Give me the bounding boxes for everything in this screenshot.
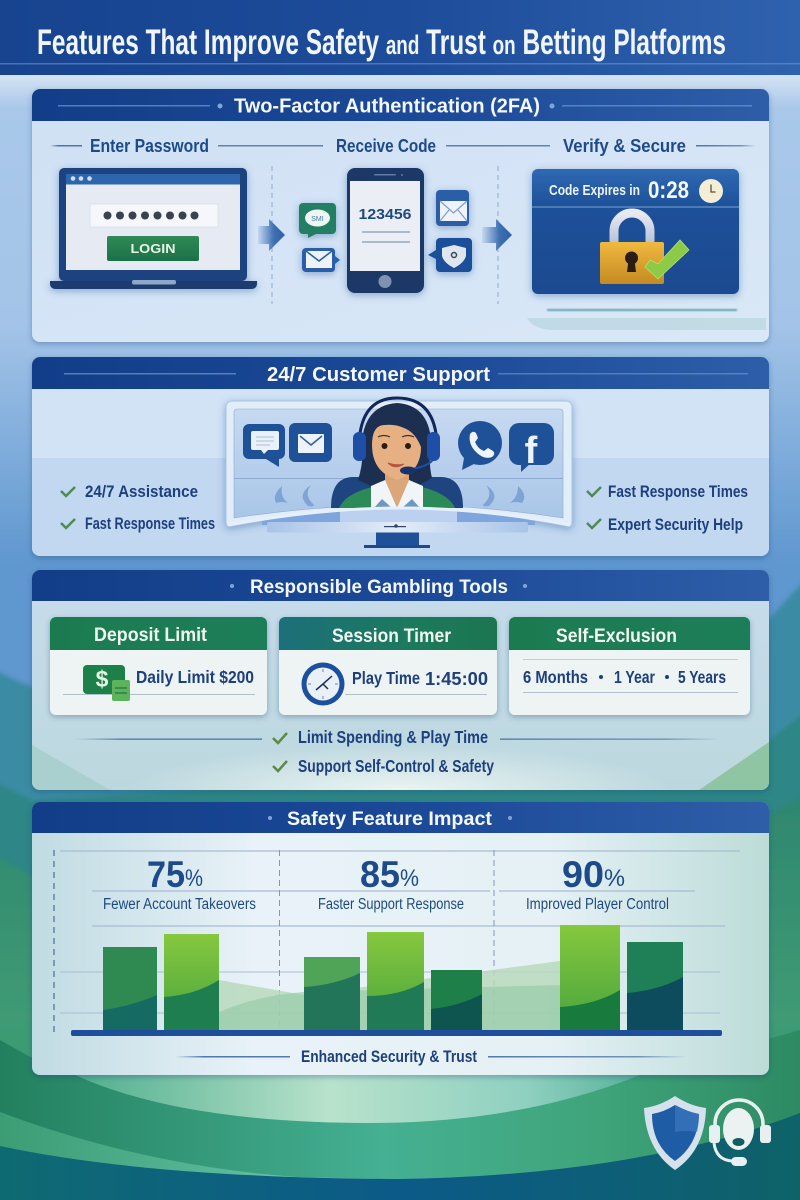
monitor with agent — [226, 398, 572, 548]
card: code expiry and lock: Code Expires in — [549, 182, 640, 199]
panel header: tools: Responsible Gambling Tools — [250, 577, 508, 598]
icon: phone bubble — [458, 421, 502, 470]
icon: money: $ — [96, 666, 109, 692]
stat: 75% — [103, 854, 256, 913]
card: deposit limit: Daily Limit $200 — [136, 667, 254, 687]
icon: facebook bubble — [509, 423, 554, 472]
bar 7 — [627, 942, 683, 1032]
bar 6 — [560, 925, 620, 1032]
icon: phone with code: 123456 — [358, 206, 412, 223]
benefits list: Support Self-Control & Safety — [298, 756, 494, 776]
icon: envelope right — [436, 190, 469, 226]
chart baseline — [71, 1030, 722, 1036]
chart grid — [54, 850, 740, 1035]
bar 5 — [431, 970, 482, 1032]
icon: clock — [699, 179, 723, 203]
panel header: tools — [32, 570, 769, 601]
list: right benefits: Fast Response Times — [608, 483, 748, 501]
card: code expiry and lock: 0:28 — [648, 177, 689, 204]
bar 3 — [304, 957, 360, 1032]
icon: money — [83, 665, 130, 701]
card: self-exclusion: 5 Years — [678, 667, 726, 687]
step labels — [50, 135, 756, 156]
list: right benefits: Expert Security Help — [608, 516, 743, 534]
agent — [331, 398, 463, 508]
bar 2 — [164, 934, 219, 1032]
monitor screen — [234, 409, 563, 518]
icon: support headset — [709, 1100, 771, 1166]
panel: two-factor authentication — [32, 89, 769, 342]
arrow: to code — [258, 219, 285, 251]
benefits list — [75, 727, 720, 776]
panel: customer support — [32, 357, 769, 556]
step labels: Enter Password — [90, 135, 209, 156]
stat: 75%: 75 — [147, 854, 185, 895]
stat: 90%: 90 — [562, 854, 604, 895]
icon: shield bubble — [428, 238, 472, 272]
arrow: to verify — [482, 219, 512, 251]
panel header: support — [32, 357, 769, 389]
icon: phone with code — [347, 168, 424, 293]
card: deposit limit — [50, 617, 267, 715]
card: self-exclusion: Self-Exclusion — [556, 626, 677, 647]
bar 1 — [103, 947, 157, 1032]
icon: laptop login — [50, 168, 257, 289]
stat: 75%: % — [185, 865, 203, 892]
step labels: Receive Code — [336, 135, 436, 156]
stat: 90% — [526, 854, 669, 913]
stat: 75%: Fewer Account Takeovers — [103, 896, 256, 913]
stat: 85%: % — [400, 865, 419, 892]
panel header: impact — [32, 802, 769, 833]
benefits list: Limit Spending & Play Time — [298, 727, 488, 747]
stat: 90%: % — [604, 865, 625, 892]
icon: shield — [644, 1096, 706, 1170]
list: left benefits: 24/7 Assistance — [85, 483, 198, 501]
panel: safety feature impact — [32, 802, 769, 1075]
bar 4 — [367, 932, 424, 1032]
login button — [107, 236, 199, 261]
stat: 90%: Improved Player Control — [526, 896, 669, 913]
title banner — [0, 0, 800, 75]
stat: 85%: Faster Support Response — [318, 896, 464, 913]
panel header: support: 24/7 Customer Support — [267, 364, 490, 386]
stat: 85% — [318, 854, 464, 913]
card: self-exclusion — [509, 617, 750, 715]
monitor stand — [364, 532, 430, 548]
icon: mail — [289, 423, 332, 462]
icon: padlock with check — [600, 213, 689, 284]
password field — [90, 204, 218, 227]
card: code expiry and lock — [532, 169, 739, 294]
panel header: impact: Safety Feature Impact — [287, 809, 493, 830]
moons decoration — [275, 485, 524, 506]
monitor lower lens — [228, 508, 570, 532]
icon: clock timer — [302, 662, 344, 706]
stat: 85%: 85 — [360, 854, 400, 895]
step labels: Verify & Secure — [563, 135, 686, 156]
card: session timer: Session Timer — [332, 626, 452, 647]
card: self-exclusion: 6 Months — [523, 667, 588, 687]
monitor frame — [226, 401, 572, 526]
card: session timer — [279, 617, 497, 715]
login button: LOGIN — [130, 241, 176, 256]
icon: facebook bubble: f — [525, 430, 538, 472]
icon: envelope left — [302, 248, 340, 272]
card: session timer: Play Time — [352, 668, 420, 688]
card: self-exclusion: 1 Year — [614, 667, 655, 687]
panel header: 2FA: Two-Factor Authentication (2FA) — [234, 94, 540, 118]
chart caption: Enhanced Security & Trust — [301, 1047, 477, 1066]
list: left benefits: Fast Response Times — [85, 514, 215, 533]
bar chart — [71, 925, 722, 1036]
title: Features That Improve Safety and Trust on Betting Platforms — [37, 23, 726, 62]
panel: responsible gambling tools — [32, 570, 769, 790]
icon: chat bubble — [243, 424, 285, 467]
icon: SMS bubble: SMI — [311, 216, 324, 223]
card: session timer: 1:45:00 — [425, 669, 488, 689]
list: right benefits — [587, 483, 748, 534]
icon: SMS bubble — [299, 203, 336, 238]
decorative streak — [527, 309, 766, 330]
card: deposit limit: Deposit Limit — [94, 625, 208, 646]
list: left benefits — [61, 483, 215, 533]
panel header: 2FA — [32, 89, 769, 121]
